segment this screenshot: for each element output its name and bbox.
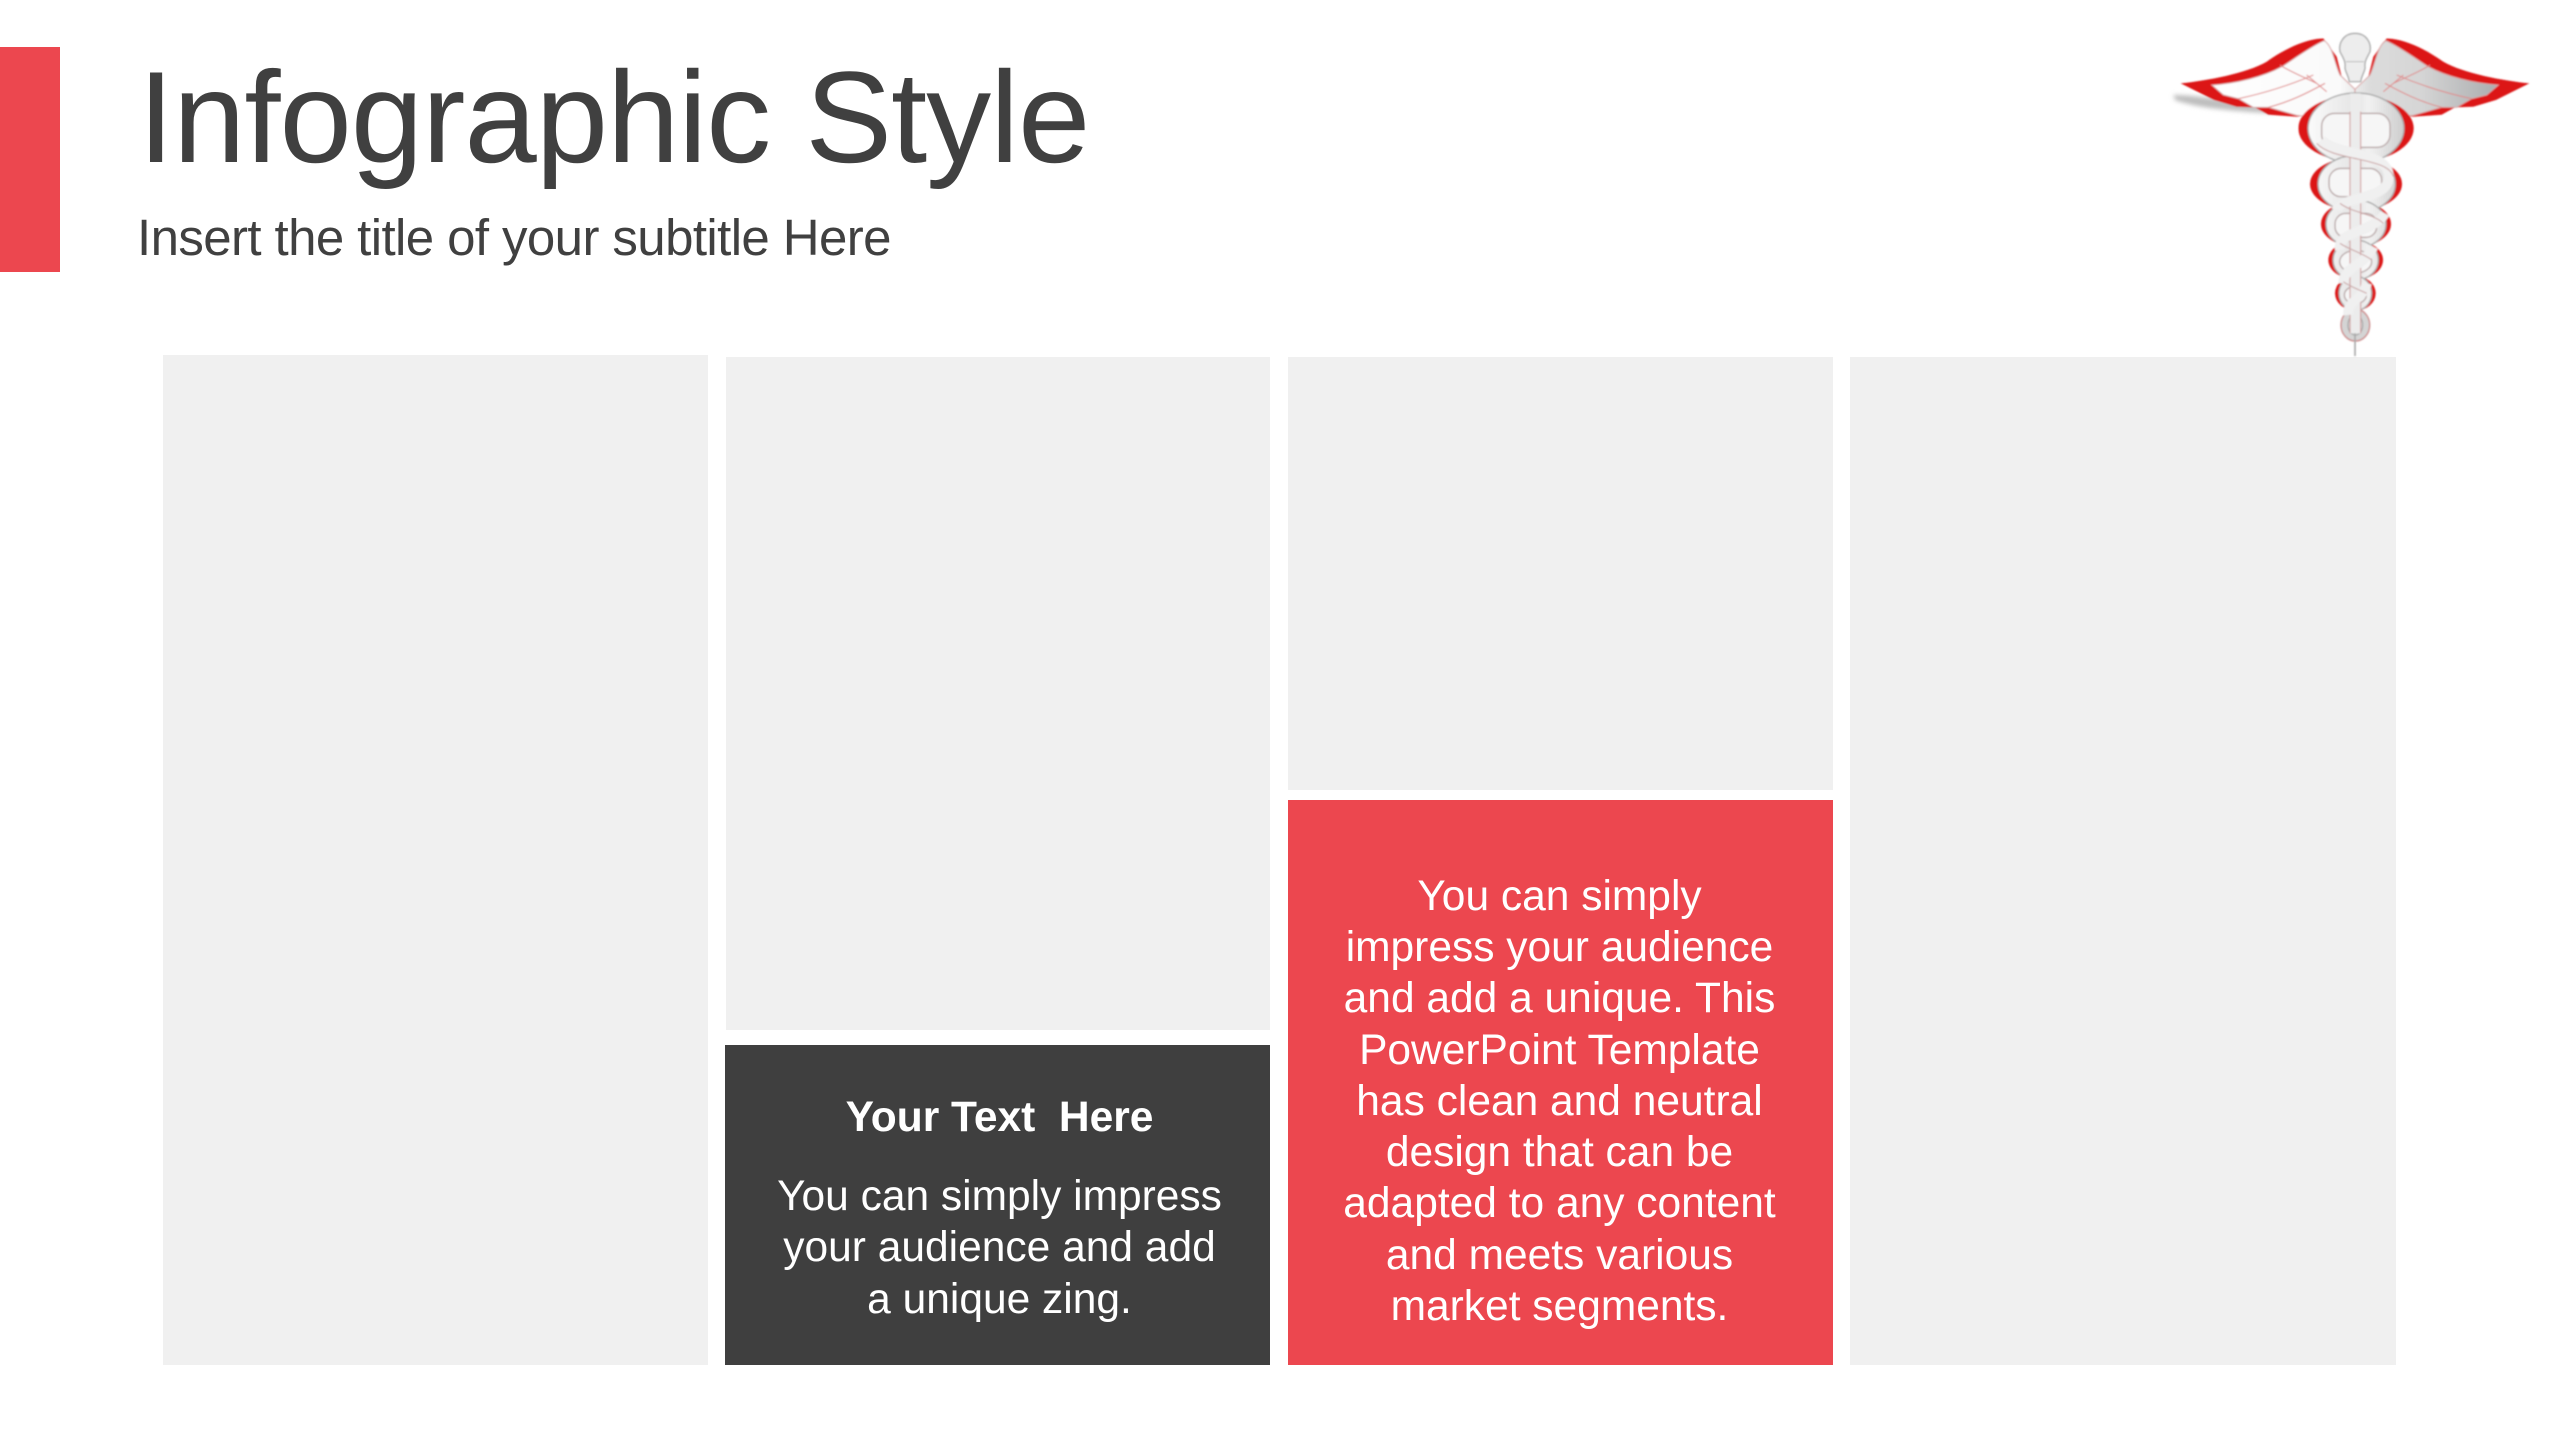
red card body text: design that can be bbox=[1386, 1129, 1733, 1176]
red card body text: impress your audience bbox=[1346, 924, 1773, 971]
snake crossing strokes bbox=[2317, 140, 2393, 315]
title: Infographic Style bbox=[138, 44, 1089, 190]
red card body text bbox=[1343, 873, 1776, 1330]
panel: column 3 placeholder bbox=[1288, 357, 1833, 790]
left wing bbox=[2181, 38, 2355, 117]
panel: dark text card bbox=[725, 1045, 1270, 1365]
snake coils: red backing bbox=[2298, 95, 2414, 311]
staff bbox=[2350, 93, 2361, 356]
coil openings bbox=[2322, 113, 2390, 335]
card body text: your audience and add bbox=[783, 1224, 1216, 1271]
red card body text: has clean and neutral bbox=[1356, 1078, 1763, 1125]
panel: column 4 placeholder bbox=[1850, 357, 2396, 1365]
right wing bbox=[2355, 38, 2529, 117]
panel: column 1 placeholder bbox=[163, 355, 708, 1365]
red card body text: and add a unique. This bbox=[1344, 975, 1775, 1022]
red card body text: You can simply bbox=[1417, 873, 1702, 920]
red card body text: PowerPoint Template bbox=[1359, 1027, 1760, 1074]
red card body text: and meets various bbox=[1386, 1232, 1733, 1279]
card body text bbox=[777, 1173, 1222, 1323]
card body text: a unique zing. bbox=[867, 1276, 1132, 1323]
red card body text: adapted to any content bbox=[1343, 1180, 1776, 1227]
icon: caduceus medical symbol bbox=[2172, 32, 2530, 357]
panel: column 2 placeholder bbox=[726, 357, 1270, 1030]
card body text: You can simply impress bbox=[777, 1173, 1222, 1220]
staff head bbox=[2340, 33, 2370, 82]
subtitle: Insert the title of your subtitle Here bbox=[137, 209, 891, 266]
wing shadow bbox=[2173, 95, 2273, 113]
panel: red text card bbox=[1288, 800, 1833, 1365]
red accent bar bbox=[0, 47, 60, 272]
snake coils: silver bodies bbox=[2308, 93, 2404, 341]
card heading: Your Text Here bbox=[846, 1094, 1153, 1141]
red card body text: market segments. bbox=[1391, 1283, 1728, 1330]
